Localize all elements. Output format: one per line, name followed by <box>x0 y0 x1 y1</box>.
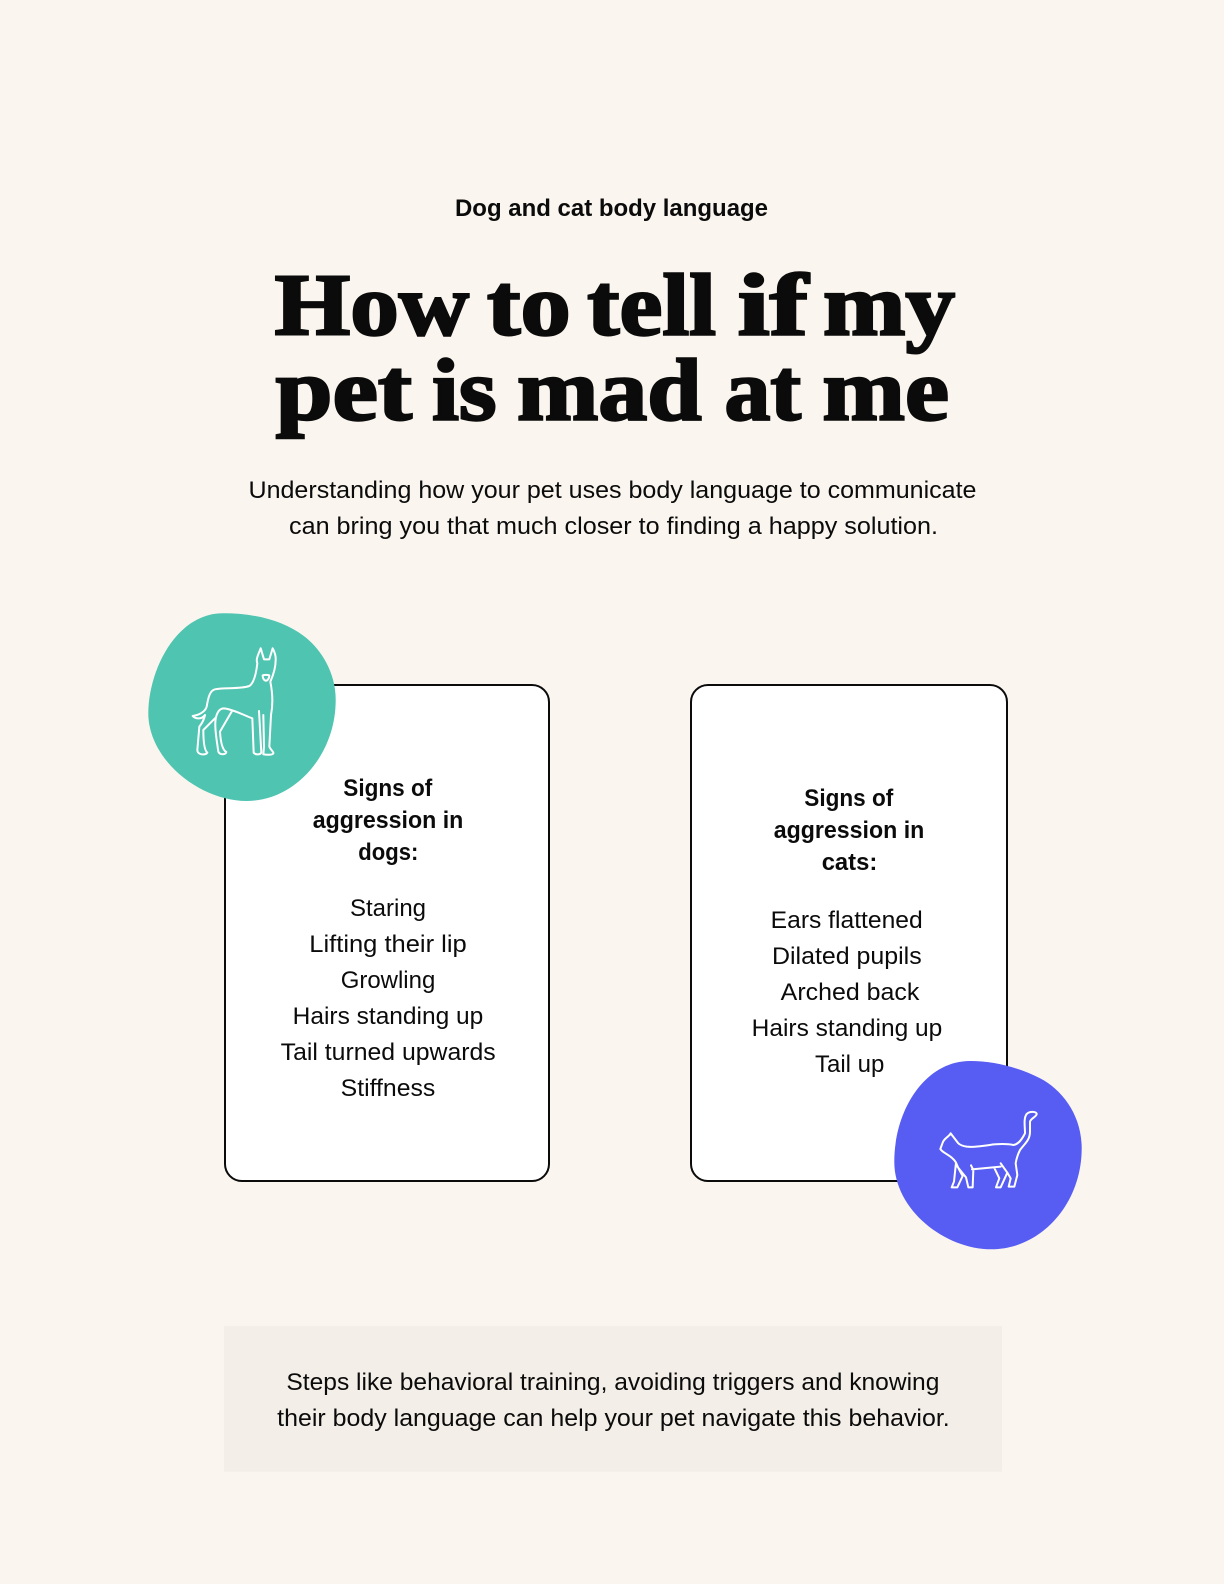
list: dog signs: Stiffness <box>341 1075 435 1102</box>
list: dog signs: Lifting their lip <box>309 931 467 958</box>
title: tell <box>587 258 716 354</box>
heading: signs of aggression in cats: Signs of <box>804 785 894 812</box>
heading: signs of aggression in dogs: dogs: <box>358 839 418 866</box>
heading: signs of aggression in cats <box>774 785 924 876</box>
list: dog signs <box>281 895 496 1102</box>
title: me <box>822 342 949 440</box>
list: cat signs: Arched back <box>781 979 920 1006</box>
title: at <box>724 342 801 440</box>
callout: closing advice <box>224 1326 1002 1472</box>
list: cat signs: Ears flattened <box>771 907 923 934</box>
panel: cat aggression signs <box>691 685 1007 1181</box>
icon: cat on blue blob <box>894 1061 1082 1249</box>
heading: signs of aggression in dogs: aggression in <box>313 807 463 834</box>
list: dog signs: Hairs standing up <box>293 1003 483 1030</box>
intro text: can bring you that much closer to finding a happy solution. <box>289 513 938 540</box>
eyebrow heading: Dog and cat body language <box>455 195 768 222</box>
list: cat signs: Tail up <box>815 1051 884 1078</box>
callout text <box>277 1369 950 1432</box>
title: is <box>432 342 497 440</box>
list: dog signs: Tail turned upwards <box>281 1039 496 1066</box>
list: cat signs <box>752 907 942 1078</box>
title: mad <box>517 342 702 440</box>
panel: dog aggression signs <box>225 685 549 1181</box>
list: cat signs: Dilated pupils <box>772 943 922 970</box>
title: How <box>275 258 469 354</box>
list: cat signs: Hairs standing up <box>752 1015 942 1042</box>
callout text: their body language can help your pet navigate this behavior. <box>277 1405 950 1432</box>
title: my <box>823 258 955 354</box>
intro text <box>248 477 976 540</box>
callout text: Steps like behavioral training, avoiding triggers and knowing <box>286 1369 939 1396</box>
list: dog signs: Staring <box>350 895 426 922</box>
list: dog signs: Growling <box>341 967 435 994</box>
title: pet <box>276 342 412 440</box>
title: to <box>487 258 571 354</box>
icon: dog on teal blob <box>148 613 336 801</box>
intro text: Understanding how your pet uses body language to communicate <box>248 477 976 504</box>
heading: signs of aggression in cats: aggression in <box>774 817 924 844</box>
heading: signs of aggression in dogs: Signs of <box>343 775 433 802</box>
title: if <box>738 258 810 354</box>
heading: signs of aggression in cats: cats: <box>822 849 877 876</box>
title <box>275 258 955 440</box>
heading: signs of aggression in dogs <box>313 775 463 866</box>
